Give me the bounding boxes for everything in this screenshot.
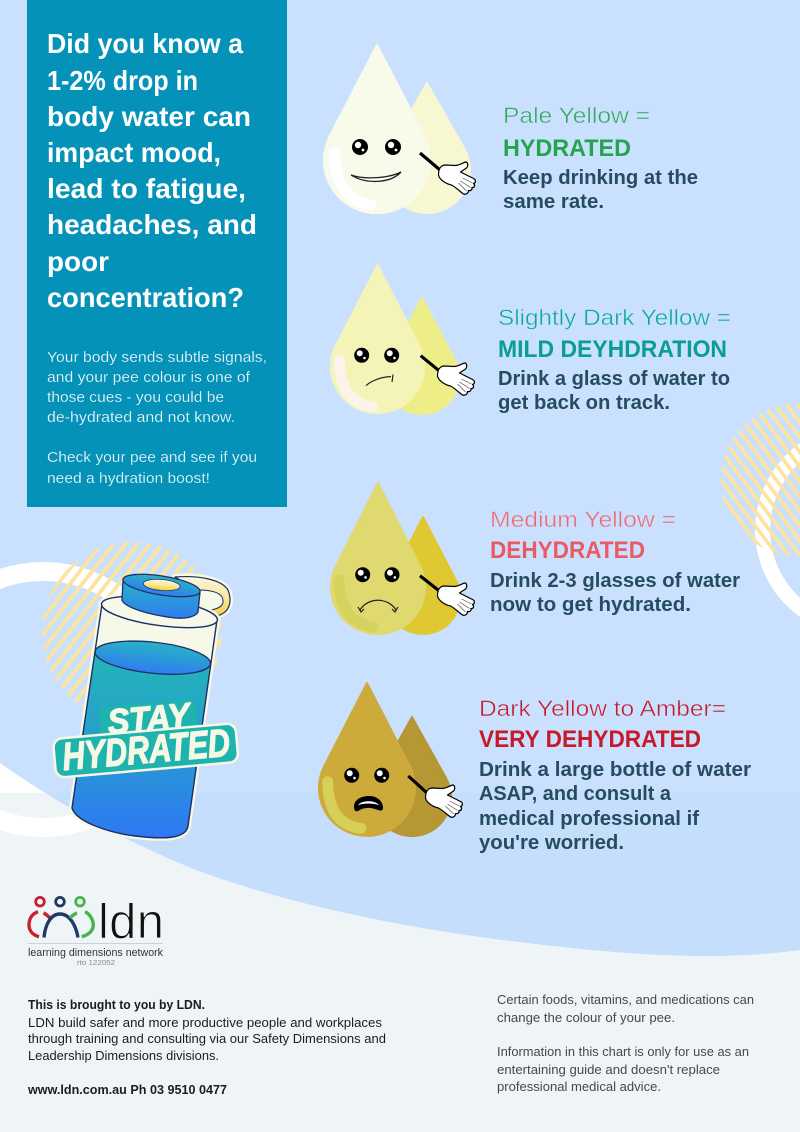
label: pale yellow: HYDRATED [503, 135, 631, 162]
character: dark yellow to amber drop [319, 683, 462, 836]
bottle handle [175, 577, 230, 619]
intro paragraph: need a hydration boost! [47, 470, 210, 487]
label: slightly dark yellow: Drink a glass of water to [498, 368, 730, 390]
striped circle right [721, 404, 800, 556]
footer text: disclaimer [497, 992, 754, 1094]
label: pale yellow: Pale Yellow = [503, 103, 650, 128]
footer text: disclaimer: change the colour of your pee. [497, 1010, 675, 1025]
heading: lead to fatigue, [47, 173, 246, 204]
lower background band [0, 793, 800, 1132]
heading [47, 28, 257, 313]
label: medium yellow: DEHYDRATED [490, 537, 645, 564]
label: dark yellow to amber: VERY DEHYDRATED [479, 726, 701, 753]
logo: ldn: rto 122052 [77, 958, 115, 967]
logo: ldn: ldn [98, 895, 164, 949]
character: medium yellow drop [331, 483, 474, 634]
striped circle left [42, 542, 222, 722]
heading: 1-2% drop in [47, 65, 198, 96]
footer text: about LDN: through training and consulting via our Safety Dimensions and [28, 1031, 386, 1046]
intro paragraph: those cues - you could be [47, 389, 224, 406]
heading: impact mood, [47, 137, 221, 168]
label: medium yellow: Drink 2-3 glasses of water [490, 570, 740, 592]
footer text: about LDN [27, 997, 386, 1097]
label: slightly dark yellow: get back on track. [498, 392, 670, 414]
white swoosh upper part [0, 763, 800, 1132]
illustration: water bottle [50, 570, 239, 838]
logo: ldn: learning dimensions network [28, 947, 163, 959]
label: medium yellow: now to get hydrated. [490, 594, 691, 616]
sticker: stay hydrated: STAY [106, 696, 193, 742]
footer text: disclaimer: Information in this chart is only for use as an [497, 1044, 749, 1059]
heading: headaches, and [47, 209, 257, 240]
footer text: about LDN: Leadership Dimensions divisions. [28, 1048, 219, 1063]
label: slightly dark yellow: MILD DEYHDRATION [498, 336, 727, 363]
heading: Did you know a [47, 28, 243, 59]
label: pale yellow [503, 103, 698, 213]
intro paragraph: Check your pee and see if you [47, 449, 257, 466]
character: slightly dark yellow drop [331, 265, 474, 414]
label: slightly dark yellow [498, 305, 731, 414]
sticker: stay hydrated [50, 692, 239, 780]
footer text: disclaimer: entertaining guide and doesn't replace [497, 1062, 720, 1077]
footer text: about LDN: LDN build safer and more productive people and workplaces [28, 1015, 383, 1030]
heading: concentration? [47, 282, 244, 313]
label: dark yellow to amber [479, 696, 751, 854]
label: pale yellow: Keep drinking at the [503, 167, 698, 189]
intro paragraph: Your body sends subtle signals, [47, 349, 267, 366]
label: slightly dark yellow: Slightly Dark Yellow = [498, 305, 731, 330]
label: dark yellow to amber: medical professional if [479, 808, 699, 830]
footer text: about LDN: This is brought to you by LDN. [28, 997, 205, 1012]
label: dark yellow to amber: Drink a large bottle of water [479, 759, 751, 781]
sticker: stay hydrated: HYDRATED [61, 722, 232, 779]
intro paragraph: and your pee colour is one of [47, 369, 251, 386]
panel: intro [27, 0, 287, 507]
character: pale yellow drop [324, 45, 475, 213]
footer background [0, 763, 800, 1132]
footer text: disclaimer: professional medical advice. [497, 1079, 661, 1094]
bottle body [72, 590, 219, 838]
intro paragraph [47, 349, 267, 487]
intro paragraph: de-hydrated and not know. [47, 409, 235, 426]
footer text: about LDN: www.ldn.com.au Ph 03 9510 0477 [27, 1082, 227, 1097]
heading: body water can [47, 101, 251, 132]
white ring right [763, 431, 800, 629]
label: pale yellow: same rate. [503, 191, 604, 213]
heading: poor [47, 246, 109, 277]
footer text: disclaimer: Certain foods, vitamins, and medications can [497, 992, 754, 1007]
white ring left [0, 572, 171, 828]
logo: ldn [28, 895, 164, 967]
label: medium yellow: Medium Yellow = [490, 507, 676, 532]
label: dark yellow to amber: you're worried. [479, 832, 624, 854]
label: dark yellow to amber: Dark Yellow to Amber= [479, 696, 726, 721]
bottle cap [121, 570, 202, 618]
label: medium yellow [490, 507, 740, 616]
label: dark yellow to amber: ASAP, and consult a [479, 783, 672, 805]
